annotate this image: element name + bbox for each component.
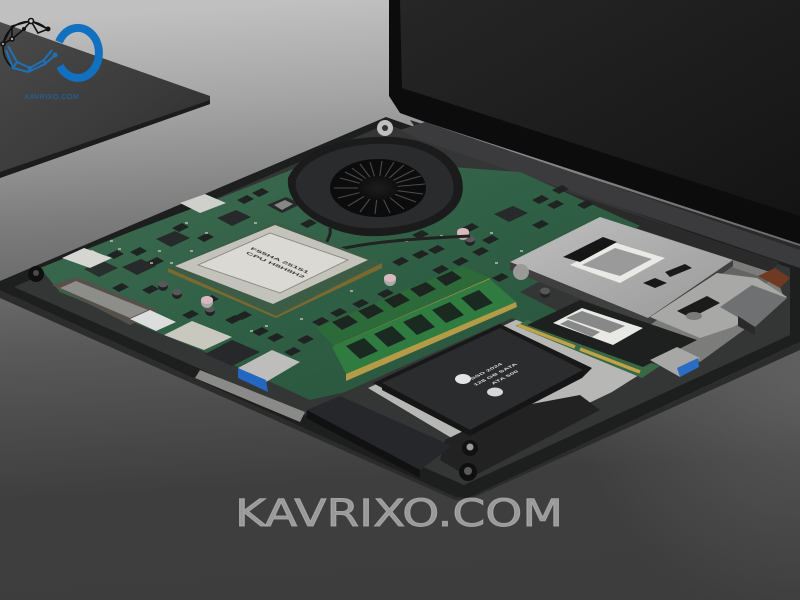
CPU — [168, 222, 382, 318]
black SSD — [373, 324, 600, 478]
base shell — [0, 117, 800, 498]
SSD body — [382, 328, 583, 430]
silver drive — [510, 217, 733, 325]
SSD printed text: ATA 500 — [490, 369, 521, 385]
watermark: KAVRIXO.COM — [235, 492, 563, 535]
logo wordmark: KAVRIXO.COM — [25, 94, 79, 101]
USB port blue left — [238, 350, 300, 382]
CPU marking: CPU H8H8H2 — [245, 251, 306, 279]
M.2 label — [553, 308, 643, 345]
RAM stick upper — [316, 266, 490, 351]
silver tray floor — [368, 318, 650, 455]
inner tray — [14, 124, 790, 485]
SSD printed text: SSD 2024 — [469, 362, 505, 381]
CPU substrate — [168, 222, 382, 316]
speaker bar — [306, 396, 452, 478]
drive slots — [563, 237, 617, 262]
fan blades — [330, 159, 426, 217]
CPU marking: F55HA 25151 — [249, 246, 311, 275]
drive label — [570, 242, 665, 283]
left side ports — [52, 194, 300, 392]
board chips — [70, 185, 594, 356]
fan cable — [327, 228, 470, 250]
SSD printed text — [465, 358, 527, 391]
logo network globe — [1, 18, 58, 72]
closed device at top left — [0, 22, 210, 178]
laptop base — [0, 117, 800, 500]
RAM stick lower — [332, 279, 517, 381]
logo ring — [59, 28, 99, 78]
drive body — [510, 217, 733, 318]
port block — [720, 285, 787, 327]
logo — [1, 18, 99, 101]
bottom screw posts — [28, 120, 478, 481]
SSD carrier — [373, 324, 592, 436]
RAM sticks — [316, 266, 517, 381]
SSD printed text: 128 GB SATA — [472, 362, 520, 387]
right silver plate and port block — [650, 268, 790, 338]
M.2 module — [516, 300, 697, 378]
M.2 gold contacts — [518, 325, 640, 372]
USB port blue right — [650, 347, 700, 377]
flex cable — [758, 268, 790, 288]
drive badge — [643, 278, 667, 288]
laptop screen — [389, 0, 800, 268]
cooling fan — [288, 137, 463, 236]
motherboard — [40, 158, 650, 400]
fan hub — [358, 176, 398, 200]
CPU heat spreader — [175, 225, 368, 304]
board component speckle — [110, 222, 523, 337]
SSD emblem — [455, 374, 471, 384]
